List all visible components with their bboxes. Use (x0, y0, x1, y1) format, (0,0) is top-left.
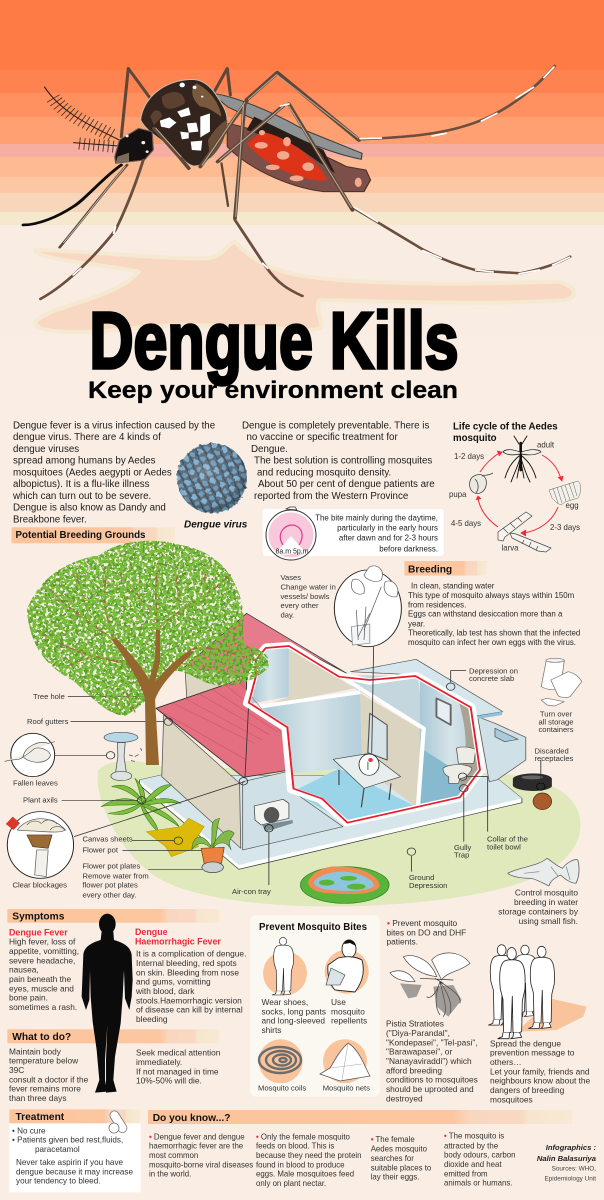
fact 2: only on plant nectar. (256, 1179, 326, 1188)
prevent bites note: Prevent mosquito (392, 918, 457, 928)
fact 3: suitable places to (371, 1163, 432, 1172)
life cycle panel (449, 422, 581, 552)
prevention captions: Wear shoes, (262, 997, 308, 1007)
near legs (40, 66, 570, 299)
vases note: vessels/ bowls (280, 592, 330, 601)
intro text: what dengue is: Breakbone fever. (13, 514, 87, 525)
tree crown light foliage (27, 541, 269, 716)
door (368, 713, 387, 760)
life cycle labels: 2-3 days (550, 523, 580, 532)
icon: dengue virus particle (177, 443, 247, 513)
dengue fever symptoms: eyes, muscle and (9, 983, 74, 993)
label: flower pot: Flower pot (82, 846, 119, 855)
prevent bites note: • (387, 918, 390, 928)
trunk (112, 630, 193, 765)
fact 1: most common (149, 1151, 198, 1160)
label: discarded receptacles: receptacles (534, 754, 574, 763)
fact 4: animals or humans. (444, 1179, 512, 1188)
prevention captions: and long-sleeved (262, 1016, 325, 1026)
what to do: fever: 39C (9, 1065, 24, 1075)
spread the message text: mosquitoes (490, 1094, 533, 1104)
inset: clear blockages (6, 812, 74, 878)
icon: group of people talking (488, 945, 587, 1039)
fact 2: because they need the protein (256, 1151, 362, 1160)
breeding text: mosquito can infect her own eggs with the virus. (408, 638, 576, 647)
life cycle heading: mosquito (453, 433, 497, 444)
toilet (443, 747, 476, 783)
icon: mosquito net (320, 1039, 370, 1083)
intro text: prevention: no vaccine or specific treatment for (246, 432, 398, 443)
pistia text: Pistia Stratiotes (386, 1019, 444, 1029)
treatment list: paracetamol (35, 1145, 80, 1154)
heading bar: breeding: Breeding (408, 564, 452, 575)
dengue fever symptoms: nausea, (9, 965, 39, 975)
what to do: haemorrhagic: Seek medical attention (136, 1048, 220, 1058)
heading bar: symptoms: Symptoms (12, 911, 65, 922)
credits: Infographics : (546, 1143, 596, 1152)
haemorrhagic fever description: on skin. Bleeding from nose (136, 967, 239, 977)
heading bar: what to do (7, 1029, 219, 1043)
net caption: Mosquito nets (323, 1084, 370, 1093)
fact 2: found in blood to produce (256, 1160, 345, 1169)
life cycle labels: egg (566, 501, 579, 510)
canvas sheet (146, 818, 204, 857)
spread the message text: neighbours know about the (490, 1076, 591, 1086)
dengue fever symptoms: appetite, vomitting, (9, 946, 79, 956)
heading bar: breeding (404, 561, 486, 576)
label: gully trap: Gully (454, 843, 471, 852)
inset: fallen leaves (5, 733, 55, 777)
pistia text: ("Diya-Parandal", (386, 1028, 450, 1038)
thorax (141, 79, 227, 166)
icon: clock (266, 507, 316, 560)
sources: Epidemiology Unit (544, 1176, 596, 1183)
label: clear blockages: Clear blockages (12, 880, 67, 889)
fact 1: haemorrhagic fever are the (149, 1142, 244, 1151)
fact 3: lay their eggs. (371, 1173, 420, 1182)
label: fish control: breeding in water (514, 897, 578, 907)
fact 3: Aedes mosquito (371, 1145, 428, 1154)
fish (508, 858, 579, 886)
prevention captions: shirts (262, 1025, 281, 1035)
pistia text: "Kondepasei", "Tel-pasi", (386, 1037, 478, 1047)
bird bath (104, 732, 142, 781)
icon: mosquito coil (259, 1039, 303, 1083)
vases note: Vases (280, 573, 301, 582)
haemorrhagic fever heading: Dengue (135, 927, 168, 937)
fact 2: eggs. Male mosquitoes feed (256, 1170, 354, 1179)
fact 3: searches for (371, 1154, 414, 1163)
haemorrhagic fever description: and gums, vomitting (136, 977, 211, 987)
fact 3: • The female (371, 1135, 415, 1144)
air conditioner (254, 799, 293, 832)
label: plant axils: Plant axils (23, 796, 58, 805)
intro text: prevention: and reducing mosquito density. (257, 467, 391, 478)
mosquito shadow (35, 242, 574, 332)
label: ground depression: Depression (409, 881, 447, 890)
intro text: prevention: The best solution is controlling mosquites (254, 456, 432, 467)
label: fish control: using small fish. (519, 916, 578, 926)
prevent bites note: patients. (386, 937, 418, 947)
fact 1: in the world. (149, 1170, 191, 1179)
back roof (185, 613, 347, 677)
credits: Nalin Balasuriya (537, 1154, 596, 1163)
storage containers (541, 658, 582, 706)
haemorrhagic fever description: bleeding (136, 1014, 168, 1024)
intro text: prevention: Dengue. (251, 444, 288, 455)
sources: Sources: WHO, (552, 1166, 596, 1173)
label: flower pot plates: flower pot plates (82, 881, 138, 890)
intro text: what dengue is: Dengue is also know as Dandy and (13, 503, 166, 514)
coil caption: Mosquito coils (258, 1084, 306, 1093)
pistia text: "Barawapasei", or (386, 1047, 452, 1057)
label: storage containers: all storage (538, 717, 574, 726)
subtitle: Keep your environment clean (88, 377, 458, 404)
dengue fever heading: Dengue Fever (9, 927, 68, 937)
icon: adult mosquito (503, 436, 541, 482)
treatment list: • No cure (12, 1126, 46, 1135)
heading bar: symptoms (7, 909, 219, 923)
label: flower pot plates: Flower pot plates (82, 861, 140, 870)
upstairs cut-away walls (250, 645, 289, 704)
vases note: every other (280, 601, 319, 610)
fact 2: • Only the female mosquito (256, 1132, 350, 1141)
dengue fever symptoms: pain beneath the (9, 974, 72, 984)
heading bar: potential breeding grounds (12, 527, 175, 543)
breeding text: Eggs can withstand desiccation more than a (408, 610, 563, 619)
intro text: what dengue is: dengue virus. There are 4 kinds of (13, 432, 161, 443)
label: tree hole: Tree hole (33, 692, 65, 701)
heading bar: do you know (148, 1110, 572, 1124)
label: gully trap: Trap (454, 850, 469, 860)
breeding site labels (12, 666, 579, 926)
white partition edges (258, 675, 424, 807)
tree (27, 541, 269, 765)
intro text: what dengue is: dengue viruses (13, 444, 79, 455)
fact 4: emitted from (444, 1169, 488, 1178)
label: ground depression: Ground (409, 873, 434, 882)
label: collar of toilet bowl: Collar of the (487, 835, 528, 844)
repellent caption: repellents (331, 1016, 367, 1026)
dengue fever symptoms: bone pain. (9, 993, 48, 1003)
branches (45, 560, 255, 712)
main room walls (262, 693, 362, 773)
prevent mosquito bites panel (250, 915, 380, 1097)
pistia text: destroyed (386, 1093, 423, 1103)
cut-away outline (247, 645, 482, 823)
spread the message text: dangers of breeding (490, 1085, 565, 1095)
label: fallen leaves: Fallen leaves (13, 778, 58, 787)
intro text: prevention: reported from the Western Province (254, 491, 408, 502)
dengue fever symptoms: sometimes a rash. (9, 1002, 77, 1012)
breeding illustration: house, garden and hazards (5, 566, 582, 906)
proboscis and palps (23, 165, 127, 247)
cycle arrows (476, 451, 563, 536)
haemorrhagic fever description: of disease can kill by internal (136, 1005, 243, 1015)
vases note: Change water in (280, 583, 336, 592)
breeding text: from residences. (408, 600, 466, 609)
treatment list: your tendency to bleed. (16, 1177, 100, 1186)
heading bar: potential breeding grounds: Potential Breeding Grounds (16, 530, 146, 541)
icon: larvae (498, 512, 551, 552)
life cycle labels: pupa (449, 490, 467, 499)
life cycle labels: adult (537, 440, 554, 450)
credits (537, 1143, 596, 1183)
what to do: haemorrhagic: immediately. (136, 1057, 182, 1067)
concrete roof slab (351, 659, 503, 717)
bite time text: particularly in the early hours (337, 524, 438, 533)
label: air-con tray: Air-con tray (232, 887, 271, 896)
title: Dengue Kills (90, 296, 458, 385)
life cycle labels: 1-2 days (454, 452, 484, 461)
panel heading: Prevent Mosquito Bites (259, 922, 367, 933)
table with vase (333, 753, 401, 807)
what to do: fever: fever remains more (9, 1084, 81, 1094)
label: fish control: storage containers by (498, 906, 579, 916)
bite time text: after dawn and for 2-3 hours (339, 534, 438, 543)
life cycle labels: larva (502, 544, 519, 552)
what to do: haemorrhagic: If not managed in time (136, 1066, 219, 1076)
antennae (44, 87, 119, 147)
fact 4: dioxide and heat (444, 1160, 502, 1169)
intro text: what dengue is: Dengue fever is a virus infection caused by the (13, 420, 215, 431)
intro text: prevention: Dengue is completely preventable. There is (242, 420, 429, 431)
breeding text: In clean, standing water (411, 581, 494, 590)
repellent caption: Use (331, 997, 346, 1007)
icon: applying repellent (325, 940, 369, 994)
front wall (243, 772, 343, 850)
treatment list: Never take aspirin if you have (16, 1158, 124, 1167)
icon: pistia water plant (390, 953, 470, 1017)
haemorrhagic fever heading: Haemorrhagic Fever (135, 936, 221, 946)
front roof (156, 677, 290, 777)
dengue fever symptoms: High fever, loss of (9, 937, 75, 947)
fact 4: • The mosquito is (444, 1132, 504, 1141)
wing (212, 93, 362, 159)
window (436, 698, 451, 725)
heading bar: do you know: Do you know...? (153, 1113, 230, 1124)
prevent bites note: bites on DO and DHF (386, 927, 466, 937)
spiky garden plant (101, 778, 181, 832)
breeding text: Theoretically, lab test has shown that the infected (408, 629, 580, 638)
fact 1: • Dengue fever and dengue (149, 1132, 245, 1141)
fact 4: body odours, carbon (444, 1151, 516, 1160)
breeding text: year. (408, 619, 425, 628)
back extension with water tank (478, 717, 526, 782)
icon: pupa (470, 473, 493, 493)
icon: clothed man (263, 937, 307, 995)
label: fish control: Control mosquito (515, 888, 578, 898)
label: depression on concrete slab: concrete slab (469, 674, 514, 683)
intro text: what dengue is: mosquitoes (Aedes aegypti or Aedes (13, 467, 172, 478)
breeding text: This type of mosquito always stays within 150m (408, 591, 575, 600)
what to do: fever: Maintain body (9, 1046, 61, 1056)
leader lines (55, 647, 541, 885)
what to do: fever: consult a doctor if the (9, 1074, 89, 1084)
treatment heading: Treatment (16, 1112, 65, 1123)
life cycle labels: 4-5 days (451, 519, 481, 528)
label: roof gutters: Roof gutters (27, 717, 69, 726)
heading bar: what to do: What to do? (12, 1032, 71, 1043)
haemorrhagic fever description: It is a complication of dengue. (136, 949, 246, 959)
label: storage containers: containers (538, 725, 574, 734)
label: storage containers: Turn over (540, 710, 572, 719)
human silhouette (82, 914, 133, 1093)
mosquito illustration with shadow (23, 66, 574, 332)
life cycle heading: Life cycle of the Aedes (453, 422, 558, 432)
garden ground (98, 761, 580, 906)
bite time text: The bite mainly during the daytime, (315, 514, 438, 523)
pistia text: "Nanayaviraddi") which (386, 1056, 472, 1066)
sunset banded sky (0, 0, 604, 335)
spread the message text: Let your family, friends and (490, 1066, 590, 1076)
bite time panel (263, 507, 444, 560)
floors (293, 768, 416, 823)
fact 2: feeds on blood. This is (256, 1142, 334, 1151)
intro text: what dengue is: albopictus). It is a flu-like illness (13, 479, 150, 490)
intro text: what dengue is: which can turn out to be severe. (12, 491, 151, 502)
label: flower pot plates: Remove water from (82, 871, 149, 880)
what to do: fever: temperature below (9, 1056, 79, 1066)
repellent caption: mosquito (331, 1006, 365, 1016)
haemorrhagic fever description: stools.Haemorrhagic version (136, 995, 242, 1005)
fact 4: attracted by the (444, 1141, 499, 1150)
what to do: haemorrhagic: 10%-50% will die. (136, 1076, 202, 1086)
treatment panel (9, 1109, 141, 1192)
spread the message text: others… (490, 1057, 522, 1067)
pistia text: should be uprooted and (386, 1084, 474, 1094)
label: collar of toilet bowl: toilet bowl (487, 842, 521, 852)
label: depression on concrete slab: Depression on (469, 666, 518, 675)
bite time text: before darkness. (379, 544, 438, 553)
icon: egg raft (549, 481, 581, 505)
tyre and coconut shell (513, 774, 552, 810)
haemorrhagic fever description: Internal bleeding, red spots (136, 958, 237, 968)
inset: vase with lilies (334, 566, 401, 647)
pistia text: afford breeding (386, 1065, 442, 1075)
what to do: fever: than three days (9, 1093, 67, 1103)
spread the message text: prevention message to (490, 1048, 575, 1058)
label: canvas sheets: Canvas sheets (82, 835, 133, 844)
icon: pills (108, 1109, 129, 1134)
label: discarded receptacles: Discarded (534, 746, 569, 755)
label: flower pot plates: every other day. (82, 890, 136, 899)
vases note: day. (280, 610, 294, 619)
concrete slab (139, 775, 522, 869)
left wall (162, 715, 241, 848)
treatment list: • Patients given bed rest,fluids, (12, 1136, 123, 1145)
far legs (121, 68, 230, 206)
flower pot plant (192, 818, 234, 873)
treatment list: dengue because it may increase (16, 1167, 133, 1176)
icon: clock: 8a.m 5p.m (276, 548, 309, 556)
tree crown dark foliage (27, 541, 269, 716)
fact 1: mosquito-borne viral diseases (149, 1160, 253, 1169)
abdomen (227, 117, 371, 192)
pistia text: conditions to mosquitoes (386, 1075, 478, 1085)
virus caption: Dengue virus (184, 519, 248, 530)
prevention captions: socks, long pants (262, 1006, 326, 1016)
spread the message text: Spread the dengue (490, 1038, 561, 1048)
intro text: prevention: About 50 per cent of dengue patients are (258, 479, 435, 490)
head (115, 128, 153, 163)
haemorrhagic fever description: with blood, dark (135, 986, 195, 996)
dengue fever symptoms: severe headache, (9, 955, 75, 965)
pond (300, 866, 389, 903)
intro text: what dengue is: spread among humans by Aedes (13, 456, 156, 467)
